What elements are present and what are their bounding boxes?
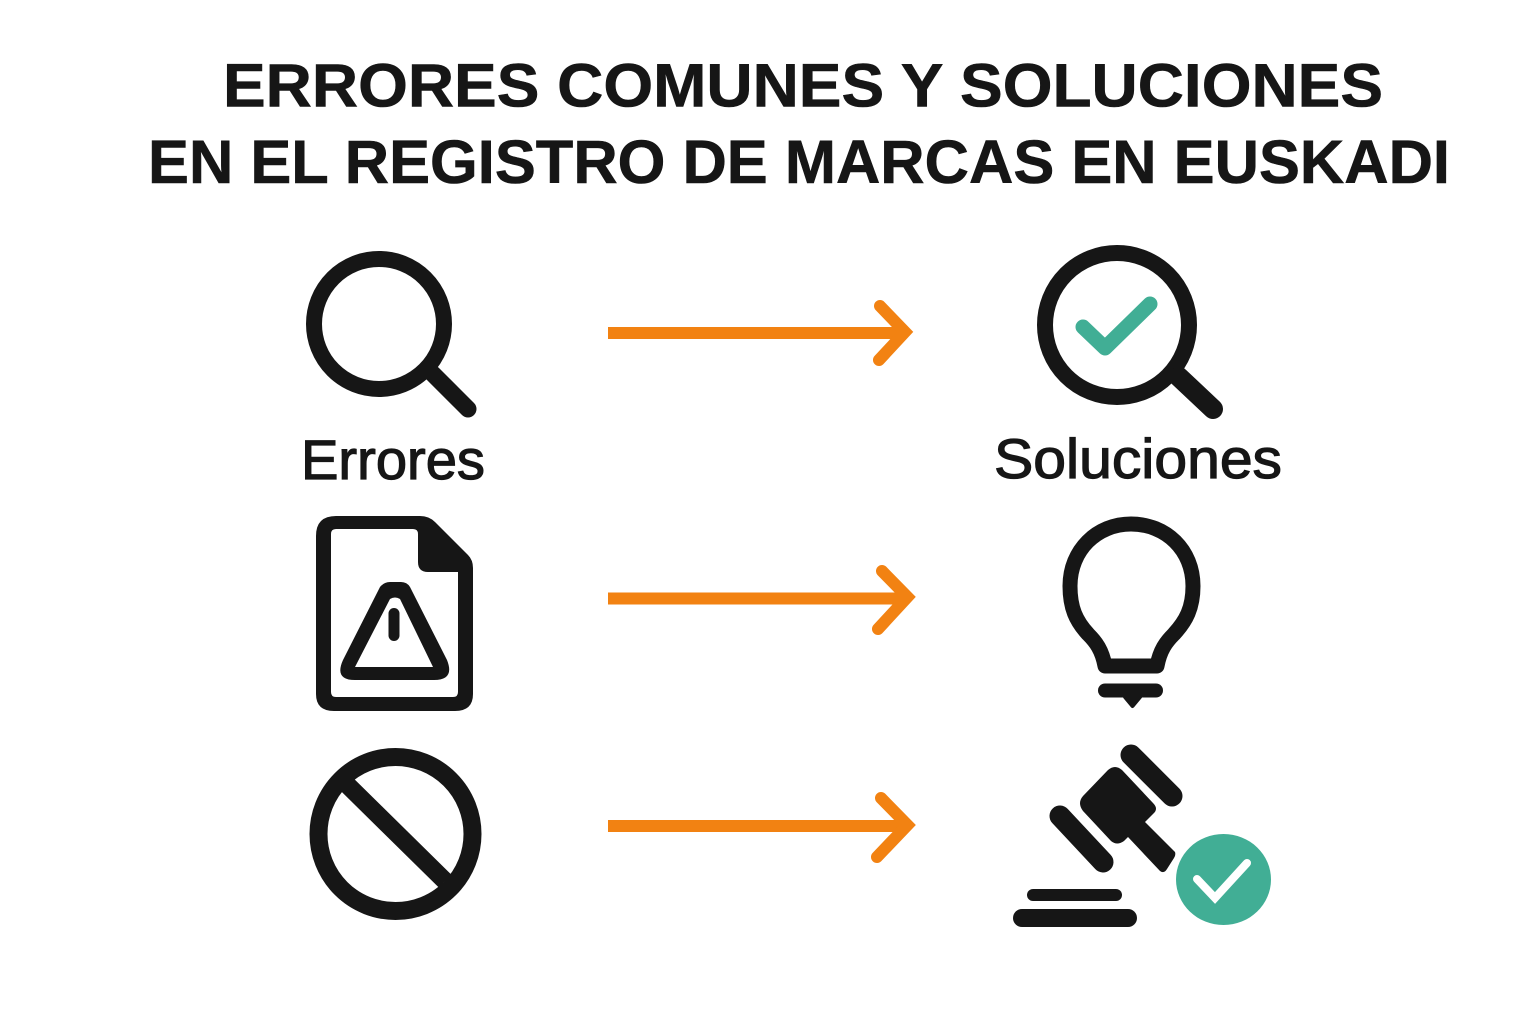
icon: magnifying glass with check	[1045, 253, 1213, 409]
arrow 3	[608, 798, 908, 857]
gavel head	[1080, 767, 1175, 872]
icon: document with warning	[316, 516, 473, 711]
icon: prohibition sign	[318, 757, 472, 911]
label: Soluciones: Soluciones	[994, 427, 1282, 490]
arrow 1	[608, 306, 905, 360]
icon: light bulb	[1070, 524, 1193, 706]
title	[148, 52, 1450, 196]
title: ERRORES COMUNES Y SOLUCIONES	[223, 52, 1383, 120]
label: Errores: Errores	[301, 428, 485, 491]
title: EN EL REGISTRO DE MARCAS EN EUSKADI	[148, 128, 1450, 196]
icon: magnifying glass errors	[314, 259, 468, 409]
arrow 2	[608, 571, 908, 629]
icon: gavel with check badge	[1022, 755, 1271, 925]
